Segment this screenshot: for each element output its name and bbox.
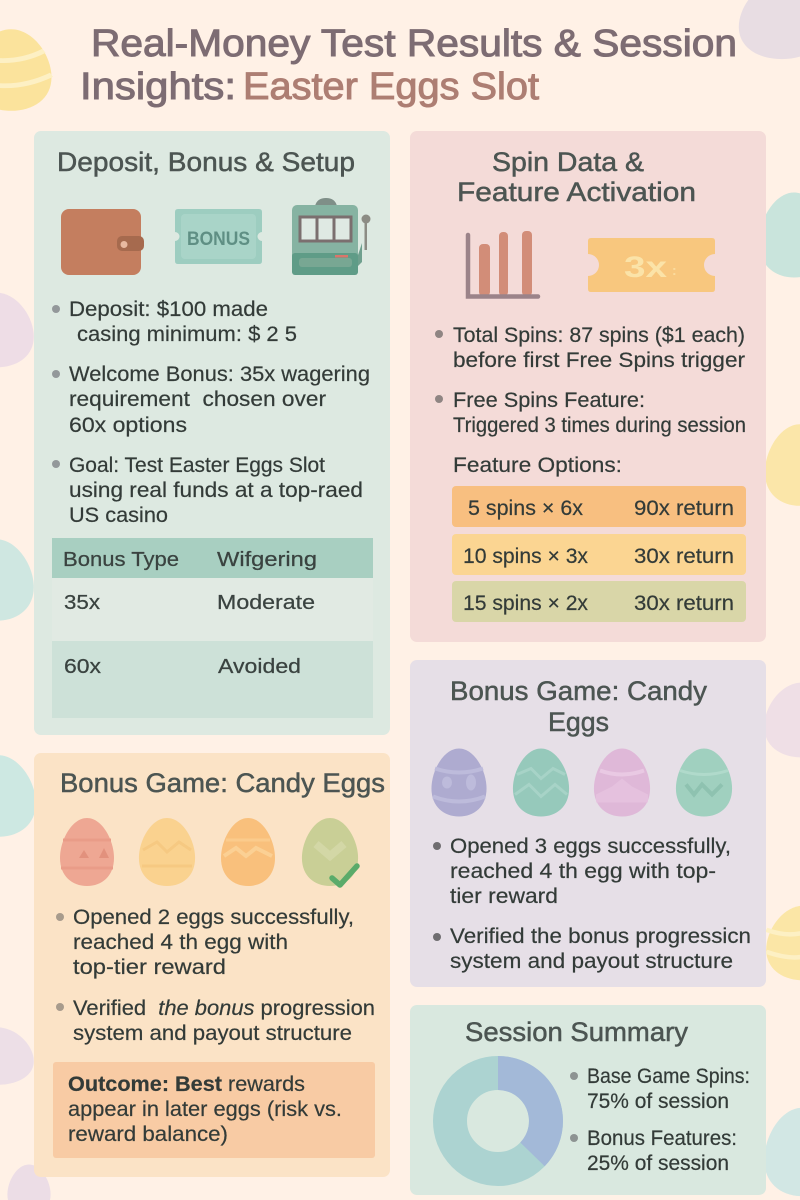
bullet: welcome bonus: Welcome Bonus: 35x wagering	[69, 363, 370, 386]
table: bonus type and wagering: Avoided	[218, 656, 301, 678]
icon: four pastel eggs	[431, 748, 732, 816]
label: feature options: Feature Options:	[453, 454, 622, 477]
table: bonus type and wagering: Bonus Type	[63, 549, 179, 571]
callout: outcome: appear in later eggs (risk vs.	[68, 1098, 342, 1121]
bullet: goal	[52, 454, 363, 527]
heading: spin data and feature activation: Feature Activation	[457, 177, 696, 207]
callout: outcome: Outcome: Best rewards	[68, 1073, 305, 1096]
icon: 3x ticket: 3x	[624, 251, 667, 284]
bullet: opened 2 eggs	[56, 906, 354, 979]
bullet: verified progression	[433, 925, 751, 973]
heading: bonus game candy eggs: Bonus Game: Candy Eggs	[60, 768, 385, 798]
title: Easter Eggs Slot	[243, 66, 539, 108]
legend: bonus features: Bonus Features:	[587, 1127, 737, 1150]
feature option: 10 spins: 10 spins × 3x	[463, 545, 588, 568]
table: bonus type and wagering: Wifgering	[217, 549, 317, 571]
bullet: goal: using real funds at a top-raed	[69, 479, 363, 502]
bullet: verified bonus progression: Verified the bonus progression	[73, 997, 375, 1020]
feature option: 5 spins: 90x return	[634, 497, 734, 520]
donut chart	[450, 1056, 563, 1169]
icon: 3x ticket	[588, 238, 715, 292]
icon: wallet	[61, 209, 144, 275]
bullet: verified progression: system and payout structure	[450, 950, 733, 973]
legend: bonus features: 25% of session	[587, 1152, 729, 1175]
heading: deposit, bonus and setup: Deposit, Bonus & Setup	[57, 147, 355, 177]
heading: bonus game candy eggs	[450, 676, 708, 737]
bullet: opened 3 eggs: Opened 3 eggs successfully,	[450, 835, 731, 858]
bullet: verified bonus progression: system and payout structure	[73, 1022, 352, 1045]
heading: bonus game candy eggs: Eggs	[548, 707, 609, 737]
feature option: 5 spins	[452, 486, 746, 527]
panel: bonus game orange	[34, 753, 390, 1177]
bullet: welcome bonus	[52, 363, 370, 437]
feature option: 15 spins: 30x return	[634, 592, 734, 615]
heading: spin data and feature activation	[457, 147, 696, 207]
table: bonus type and wagering	[52, 538, 373, 718]
bullet: free spins feature: Free Spins Feature:	[453, 389, 645, 412]
legend: base game spins: 75% of session	[587, 1090, 729, 1113]
table: bonus type and wagering: 60x	[64, 656, 101, 678]
icon: bar chart	[468, 231, 538, 296]
bullet: verified progression: Verified the bonus progressicn	[450, 925, 751, 948]
table: bonus type and wagering: 35x	[64, 592, 100, 614]
bullet: welcome bonus: requirement chosen over	[69, 388, 326, 411]
bullet: total spins	[435, 324, 745, 372]
feature option: 10 spins: 30x return	[634, 545, 734, 568]
icon: slot machine	[292, 198, 370, 275]
callout: outcome	[53, 1062, 375, 1158]
table: bonus type and wagering: Moderate	[217, 592, 315, 614]
legend: base game spins: Base Game Spins:	[587, 1065, 750, 1088]
heading: bonus game candy eggs: Bonus Game: Candy	[450, 676, 708, 706]
bullet: opened 3 eggs: tier reward	[450, 885, 558, 908]
bullet: deposit	[52, 298, 297, 346]
bullet: opened 2 eggs: reached 4 th egg with	[73, 931, 288, 954]
icon: bonus ticket	[175, 209, 262, 264]
icon: 3x ticket: :	[672, 262, 677, 278]
callout: outcome: reward balance)	[68, 1123, 228, 1146]
title: Insights:	[80, 66, 236, 108]
icon: bonus ticket: BONUS	[187, 229, 250, 250]
legend: bonus features	[570, 1127, 737, 1175]
bullet: verified bonus progression	[56, 997, 375, 1045]
heading: session summary: Session Summary	[465, 1017, 689, 1047]
bullet: goal: US casino	[69, 504, 168, 527]
feature option: 15 spins: 15 spins × 2x	[463, 592, 588, 615]
legend: base game spins	[570, 1065, 750, 1113]
feature option: 15 spins	[452, 581, 746, 622]
heading: spin data and feature activation: Spin Data &	[492, 147, 644, 177]
bullet: opened 3 eggs: reached 4 th egg with top-	[450, 860, 716, 883]
bullet: goal: Goal: Test Easter Eggs Slot	[69, 454, 325, 477]
panel: spin data and feature activation	[410, 131, 766, 642]
bullet: opened 2 eggs: top-tier reward	[73, 956, 226, 979]
panel: bonus game lavender	[410, 660, 766, 987]
feature option: 10 spins	[452, 534, 746, 575]
bullet: total spins: Total Spins: 87 spins ($1 each)	[453, 324, 745, 347]
bullet: welcome bonus: 60x options	[69, 414, 187, 437]
bullet: deposit: casing minimum: $ 2 5	[77, 323, 297, 346]
bullet: deposit: Deposit: $100 made	[69, 298, 268, 321]
bullet: free spins feature: Triggered 3 times during session	[453, 414, 746, 437]
bullet: opened 3 eggs	[433, 835, 731, 908]
bullet: free spins feature	[435, 389, 746, 437]
title	[80, 23, 737, 108]
icon: four warm eggs with check	[60, 818, 358, 886]
title: Real-Money Test Results & Session	[91, 23, 737, 65]
panel: deposit, bonus and setup	[34, 131, 390, 735]
panel: session summary	[410, 1005, 766, 1195]
feature option: 5 spins: 5 spins × 6x	[468, 497, 584, 520]
bullet: opened 2 eggs: Opened 2 eggs successfully,	[73, 906, 354, 929]
bullet: total spins: before first Free Spins trigger	[453, 349, 745, 372]
